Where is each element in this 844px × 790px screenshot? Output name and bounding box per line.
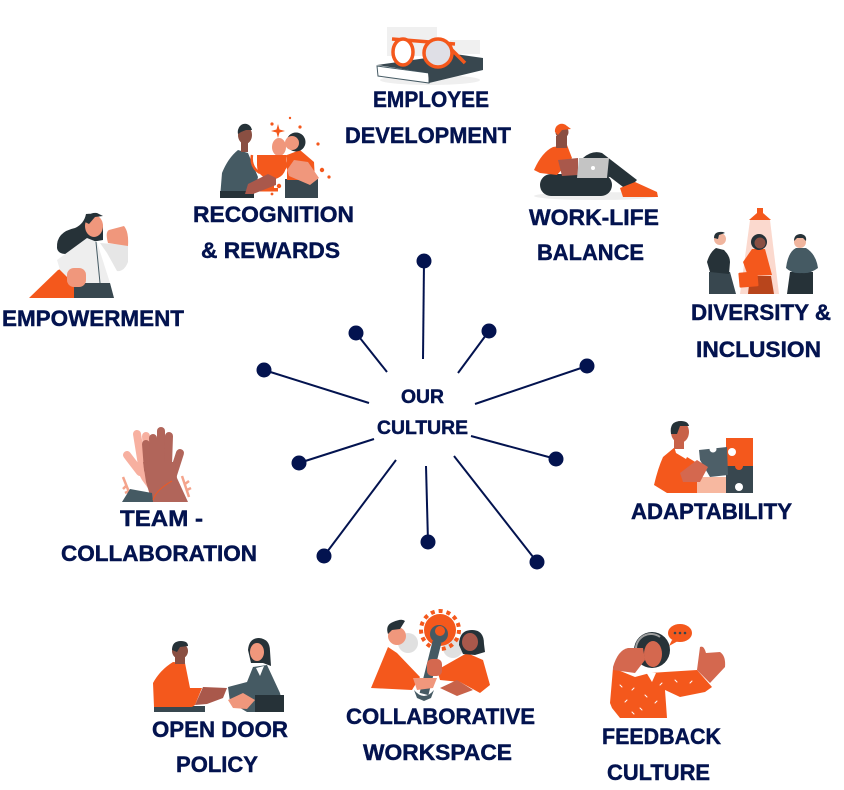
label: recognition and rewards — [193, 202, 354, 263]
icon: man assembling puzzle — [654, 421, 753, 493]
label: work-life balance — [529, 205, 659, 265]
label: team collaboration: TEAM - — [120, 506, 203, 531]
label: diversity and inclusion: DIVERSITY & — [691, 300, 831, 325]
radial hub lines and dots — [256, 254, 594, 570]
icon: three people under spotlight — [707, 208, 818, 294]
center title: CULTURE — [377, 418, 468, 439]
icon: empowered woman with cape — [29, 213, 128, 298]
label: employee development: EMPLOYEE — [373, 87, 489, 112]
icon: woman giving feedback — [610, 624, 725, 718]
label: adaptability: ADAPTABILITY — [631, 499, 792, 524]
label: team collaboration: COLLABORATION — [61, 541, 257, 566]
label: open door policy: POLICY — [176, 752, 258, 777]
label: team collaboration — [61, 506, 257, 566]
label: empowerment: EMPOWERMENT — [2, 306, 185, 331]
icon: high five hands — [122, 431, 191, 502]
label: feedback culture — [602, 724, 721, 785]
icon: glasses on book — [377, 27, 483, 85]
icon: person with laptop — [534, 124, 658, 200]
center title: OUR — [401, 387, 444, 408]
center title — [377, 387, 468, 439]
label: collaborative workspace: COLLABORATIVE — [346, 704, 535, 729]
icon: handshake — [153, 638, 284, 712]
icon: team holding wrench and gear — [371, 611, 490, 701]
label: collaborative workspace — [346, 704, 535, 765]
label: diversity and inclusion: INCLUSION — [696, 337, 821, 362]
label: diversity and inclusion — [691, 300, 831, 362]
label: feedback culture: FEEDBACK — [602, 724, 721, 749]
label: work-life balance: WORK-LIFE — [529, 205, 659, 230]
icon: trophy handover — [220, 117, 331, 198]
label: employee development — [345, 87, 512, 148]
label: open door policy: OPEN DOOR — [152, 717, 288, 742]
label: work-life balance: BALANCE — [537, 240, 644, 265]
label: recognition and rewards: RECOGNITION — [193, 202, 354, 227]
label: employee development: DEVELOPMENT — [345, 123, 512, 148]
label: open door policy — [152, 717, 288, 777]
label: recognition and rewards: & REWARDS — [201, 238, 340, 263]
label: collaborative workspace: WORKSPACE — [363, 740, 512, 765]
label: feedback culture: CULTURE — [607, 760, 710, 785]
